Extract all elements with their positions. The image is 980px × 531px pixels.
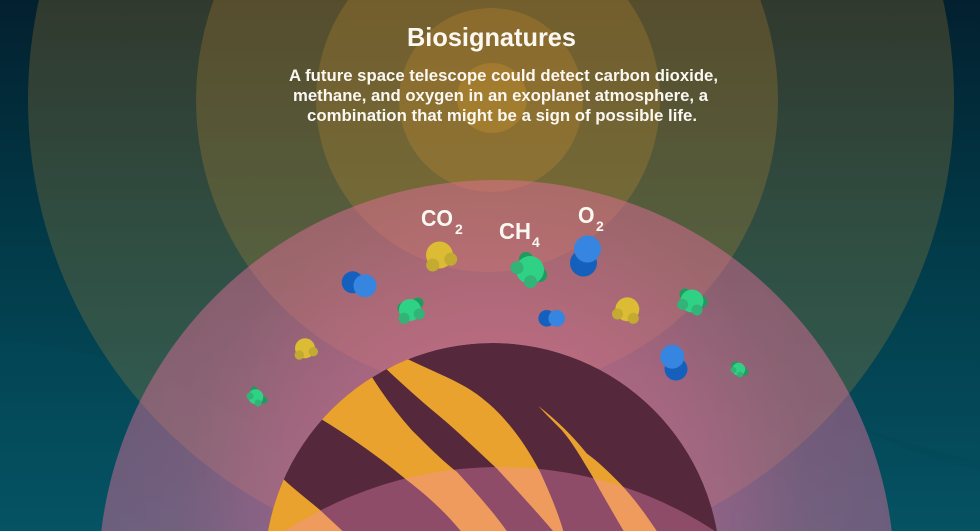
label: CH4: CH bbox=[499, 218, 531, 244]
description text: A future space telescope could detect carbon dioxide, bbox=[289, 66, 718, 85]
O2 left molecule bbox=[342, 271, 376, 297]
stripe B bbox=[322, 377, 508, 531]
atmosphere dome bbox=[98, 180, 894, 531]
O2 right molecule bbox=[660, 345, 688, 380]
label: CH4: 4 bbox=[532, 234, 540, 250]
stripe D bbox=[538, 406, 658, 531]
molecules bbox=[246, 236, 748, 406]
label: CO2 bbox=[421, 205, 463, 237]
O2 small centre molecule bbox=[538, 310, 565, 327]
CH4 large green molecule bbox=[510, 252, 547, 288]
CH4 molecule bbox=[398, 298, 425, 324]
O2 large blue molecule bbox=[570, 236, 601, 276]
CH4 tiny left molecule bbox=[246, 386, 268, 406]
label: O2: O bbox=[578, 202, 594, 228]
CO2 right molecule bbox=[612, 297, 639, 324]
planet body bbox=[264, 343, 720, 531]
CH4 right molecule bbox=[677, 288, 708, 316]
glow ring 5 bbox=[457, 63, 527, 133]
exoplanet bbox=[268, 343, 717, 531]
CH4 tiny right molecule bbox=[730, 362, 748, 378]
CO2 left molecule bbox=[295, 338, 318, 360]
description text bbox=[289, 66, 718, 125]
label: O2: 2 bbox=[596, 218, 604, 234]
label: CO2: 2 bbox=[455, 221, 463, 237]
stripe C bbox=[268, 480, 342, 531]
description text: combination that might be a sign of possible life. bbox=[307, 106, 697, 125]
label: CH4 bbox=[499, 218, 540, 250]
label: CO2: CO bbox=[421, 205, 453, 231]
description text: methane, and oxygen in an exoplanet atmosphere, a bbox=[293, 86, 709, 105]
title: Biosignatures bbox=[407, 22, 576, 52]
glow ring 4 bbox=[399, 8, 583, 192]
label: O2 bbox=[578, 202, 604, 234]
CO2 large yellow molecule bbox=[426, 242, 457, 272]
glow ring 3 bbox=[316, 0, 660, 272]
planet orange stripes bbox=[260, 359, 658, 531]
glow ring 2 bbox=[196, 0, 778, 391]
stripe A bbox=[387, 359, 564, 531]
foreground atmosphere haze bbox=[285, 467, 715, 531]
